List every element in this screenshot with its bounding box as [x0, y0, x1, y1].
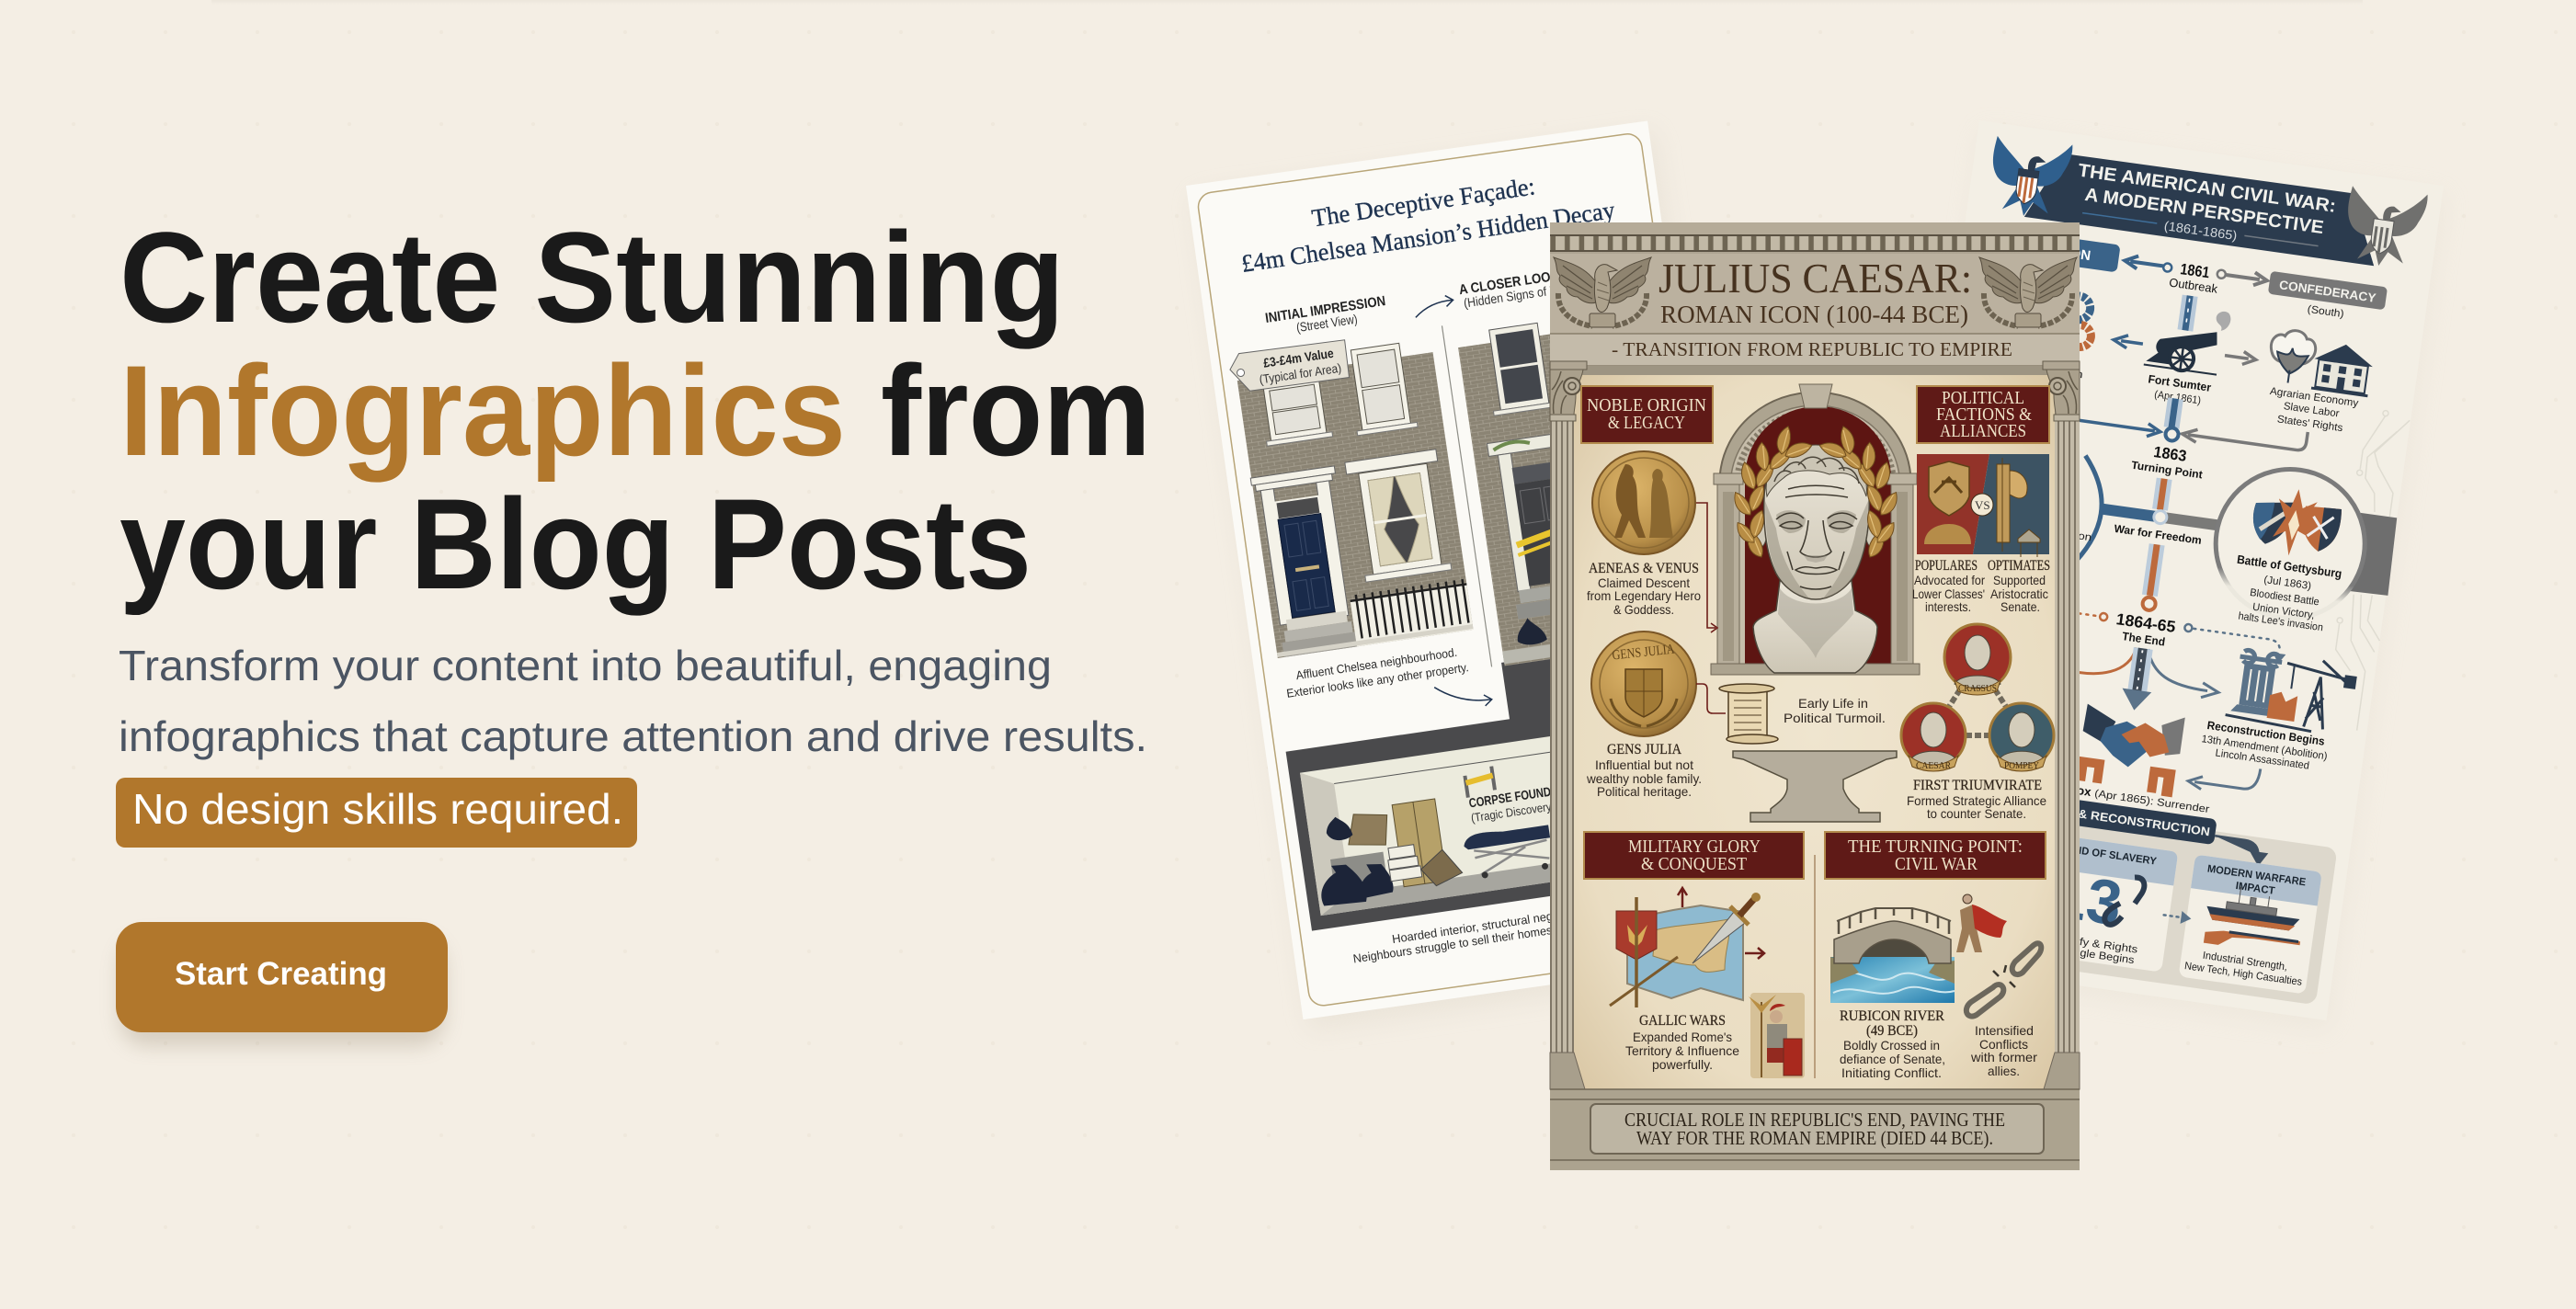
label: gallic wars: GALLIC WARS	[1639, 1013, 1726, 1029]
card: Chelsea mansion infographic	[1208, 157, 1746, 971]
caption: interior: Hoarded interior, structural neglect.	[1391, 905, 1575, 946]
caption: interior: Neighbours struggle to sell their homes.	[1352, 923, 1556, 965]
headline: your Blog Posts	[120, 472, 1032, 616]
pedestal	[1733, 751, 1897, 822]
battle of gettysburg callout: Bloodiest Battle	[2249, 587, 2320, 608]
label: corpse found: (Tragic Discovery)	[1470, 799, 1556, 825]
cornice and dentil frieze	[1550, 222, 2080, 251]
medallion: crassus	[1944, 624, 2011, 695]
title banner	[2024, 149, 2384, 266]
label: gens julia: wealthy noble family.	[1586, 771, 1702, 786]
label: early life: Early Life in	[1798, 696, 1868, 711]
label: confederacy: CONFEDERACY	[2278, 278, 2377, 305]
year 1863: Turning Point	[2130, 459, 2204, 481]
label: fort sumter: Fort Sumter	[2148, 372, 2212, 394]
arrow: north to 1863	[2076, 414, 2161, 438]
label: corpse found	[1465, 758, 1556, 825]
year 1864-65: The End	[2121, 630, 2166, 649]
headline: Infographics	[120, 338, 846, 483]
label: early life	[1784, 696, 1886, 725]
label: populares: Lower Classes'	[1912, 586, 1985, 601]
label: aeneas and venus: from Legendary Hero	[1587, 588, 1701, 603]
label: left columns: Urbanization	[2009, 359, 2083, 381]
icon: reconstruction	[2225, 648, 2358, 736]
icon: broken chain	[1966, 943, 2041, 1017]
card title: £4m Chelsea Mansion’s Hidden Decay	[1239, 196, 1617, 278]
arrow: to interior	[1434, 679, 1493, 712]
title banner: (1861-1865)	[2163, 218, 2238, 243]
legacy panel	[1900, 779, 2339, 1005]
union box	[2016, 231, 2121, 272]
right column	[2043, 361, 2080, 1089]
banner: turning point: CIVIL WAR	[1895, 854, 1978, 874]
title banner: THE AMERICAN CIVIL WAR:	[2077, 161, 2337, 217]
label: fort sumter	[2146, 372, 2212, 408]
label: populares	[1912, 558, 1985, 614]
banner: turning point: THE TURNING POINT:	[1848, 837, 2023, 857]
bust: neck shadow	[1778, 588, 1853, 658]
header band	[1550, 254, 2080, 333]
year 1863	[2130, 440, 2206, 481]
dotted arrow: slavery to warfare	[2163, 908, 2192, 925]
section label: closer look: A CLOSER LOOK	[1458, 267, 1560, 298]
pill: legacy and reconstruction	[2012, 791, 2217, 845]
highlight badge	[116, 778, 637, 848]
label: populares: Advocated for	[1914, 573, 1985, 587]
icon: battle shields	[2249, 484, 2344, 562]
label: intensified conflicts: allies.	[1988, 1064, 2020, 1078]
icon: union eagle	[1986, 134, 2073, 222]
banner: political factions: POLITICAL	[1942, 388, 2024, 408]
arrow: south to 1863	[2182, 415, 2308, 458]
box: modern warfare: IMPACT	[2235, 881, 2275, 897]
subheading text	[119, 642, 1147, 760]
banner: noble origin	[1581, 386, 1713, 443]
box: modern warfare: New Tech, High Casualties	[2183, 961, 2303, 988]
bust: facial features	[1776, 485, 1857, 589]
dark lower panel	[1278, 632, 1740, 931]
arrow: to modern warfare	[2212, 836, 2268, 865]
caption: street view: Affluent Chelsea neighbourhood.	[1295, 645, 1458, 682]
caption: street view: Exterior looks like any other property.	[1285, 660, 1469, 700]
bust: hair	[1766, 445, 1866, 496]
label: confederacy: (South)	[2307, 304, 2344, 320]
box: end of slavery: 13	[2047, 860, 2126, 939]
card title	[1235, 161, 1617, 278]
bust: ears	[1754, 516, 1767, 547]
label: agrarian economy: Slave Labor	[2283, 401, 2340, 420]
call to action button	[116, 922, 448, 1046]
label: aeneas and venus: & Goddess.	[1613, 602, 1674, 617]
medallion: pompey	[1989, 703, 2054, 771]
banner: military glory: MILITARY GLORY	[1628, 837, 1761, 857]
label: intensified conflicts: Conflicts	[1979, 1037, 2028, 1052]
icon: gens julia coin	[1591, 632, 1696, 736]
battle of gettysburg callout	[2205, 460, 2403, 642]
icon: gens julia coin: GENS JULIA	[1612, 642, 1675, 664]
arrow: 1861 to union	[2124, 255, 2164, 272]
timeline bar 1	[2177, 295, 2198, 332]
subheading text: infographics that capture attention and drive results.	[119, 712, 1147, 760]
section label: closer look	[1458, 264, 1592, 311]
icon: gears	[2061, 294, 2096, 348]
blue arc	[2069, 456, 2109, 571]
chain links	[1947, 689, 2008, 735]
label: agrarian economy: States' Rights	[2276, 414, 2343, 434]
year 1861: Outbreak	[2168, 276, 2219, 296]
arrow: 1864 to appomattox	[2119, 646, 2158, 712]
title banner: A MODERN PERSPECTIVE	[2083, 185, 2325, 238]
label: intensified conflicts	[1970, 1023, 2037, 1078]
card: Julius Caesar infographic	[1550, 222, 2080, 1170]
section label: initial impression: (Street View)	[1295, 312, 1359, 335]
label: rubicon river: (49 BCE)	[1866, 1023, 1918, 1039]
label: gens julia	[1586, 742, 1702, 799]
banner: political factions: FACTIONS &	[1936, 404, 2032, 425]
house: closer look	[1456, 305, 1706, 666]
caesar arch and bust	[1711, 384, 1920, 675]
label: gens julia: GENS JULIA	[1607, 742, 1682, 757]
vs badge: VS	[1975, 498, 1990, 512]
label: first triumvirate: to counter Senate.	[1927, 806, 2026, 821]
arrow: reconstruction to appomattox	[2187, 759, 2261, 797]
medallion: caesar	[1901, 703, 1966, 771]
year 1864-65	[2114, 609, 2177, 650]
box: modern warfare	[2179, 854, 2322, 995]
bust: face shading	[1765, 501, 1868, 598]
label: rubicon river	[1840, 1008, 1945, 1080]
box: modern warfare: MODERN WARFARE	[2206, 864, 2307, 888]
label: early life: Political Turmoil.	[1784, 711, 1886, 725]
price tag	[1228, 338, 1351, 394]
label: gallic wars: Expanded Rome's	[1633, 1030, 1732, 1044]
label: rubicon river: RUBICON RIVER	[1840, 1008, 1945, 1024]
medallion: crassus: CRASSUS	[1958, 684, 1997, 694]
banner: military glory	[1584, 832, 1804, 879]
connector: coin to scroll	[1696, 684, 1726, 713]
icon: plantation house	[2310, 340, 2376, 396]
label: optimates: OPTIMATES	[1988, 558, 2050, 574]
icon: confederate eagle	[2341, 184, 2428, 271]
highlight badge: No design skills required.	[132, 785, 623, 833]
battle of gettysburg callout: halts Lee's invasion	[2238, 611, 2324, 633]
call to action button: Start Creating	[175, 956, 387, 992]
label: aeneas and venus	[1587, 561, 1701, 617]
subtitle band: - TRANSITION FROM REPUBLIC TO EMPIRE	[1612, 338, 2012, 360]
house: street view	[1235, 338, 1474, 658]
arrow: 1861 to confederacy	[2225, 268, 2268, 287]
icon: gallic wars map	[1610, 888, 1764, 1007]
label: populares: interests.	[1925, 599, 1971, 614]
left column	[1550, 361, 1587, 1089]
icon: roman soldier	[1749, 993, 1805, 1078]
arrow: to closer look	[1413, 294, 1454, 317]
label: agrarian economy: Agrarian Economy	[2269, 386, 2359, 409]
label: first triumvirate	[1907, 778, 2046, 821]
label: appomattox	[2020, 775, 2210, 815]
year 1863: 1863	[2152, 443, 2188, 465]
battle of gettysburg callout: Union Victory,	[2251, 602, 2315, 621]
label: left columns	[1987, 359, 2114, 543]
year 1861: 1861	[2179, 260, 2211, 281]
card background: Chelsea mansion	[1186, 120, 1772, 1030]
subheading text: Transform your content into beautiful, engaging	[119, 642, 1052, 689]
label: optimates: Senate.	[2000, 599, 2040, 614]
year 1861	[2168, 259, 2221, 296]
main title: JULIUS CAESAR:	[1658, 255, 1972, 302]
medallion: caesar: CAESAR	[1916, 761, 1951, 771]
label: first triumvirate: Formed Strategic Alliance	[1907, 793, 2046, 808]
label: corpse found: CORPSE FOUND	[1468, 784, 1552, 810]
node: union	[2163, 263, 2172, 272]
interior room	[1300, 711, 1738, 916]
label: optimates: Aristocratic	[1990, 586, 2048, 601]
icon: scroll	[1719, 684, 1778, 744]
curved arrow: orange to left	[2060, 637, 2137, 680]
label: confederacy	[2265, 271, 2388, 325]
section label: initial impression	[1264, 293, 1388, 339]
node: confederacy	[2217, 269, 2226, 279]
label: reconstruction	[2199, 718, 2331, 774]
war for freedom crossroads: War for Freedom	[2114, 522, 2203, 547]
arrow: to industrial north	[2113, 334, 2144, 350]
year 1864-65: 1864-65	[2115, 609, 2177, 636]
banner: political factions: ALLIANCES	[1940, 421, 2026, 441]
section label: initial impression: INITIAL IMPRESSION	[1264, 293, 1386, 326]
icon: cannon	[2144, 302, 2231, 377]
label: reconstruction: Reconstruction Begins	[2206, 719, 2326, 748]
label: intensified conflicts: Intensified	[1975, 1023, 2034, 1038]
label: aeneas and venus: AENEAS & VENUS	[1589, 561, 1699, 576]
label: agrarian economy	[2265, 386, 2359, 436]
union box: UNION	[2046, 243, 2092, 264]
label: first triumvirate: FIRST TRIUMVIRATE	[1913, 778, 2042, 793]
card: American Civil War infographic	[1861, 120, 2447, 1030]
battle of gettysburg callout: Battle of Gettysburg	[2236, 552, 2342, 581]
icon: shield	[1929, 461, 1969, 516]
icon: caesar crossing	[1956, 894, 2007, 952]
label: intensified conflicts: with former	[1970, 1050, 2037, 1064]
medallion: pompey: POMPEY	[2004, 761, 2039, 771]
card title: The Deceptive Façade:	[1310, 172, 1537, 232]
label: rubicon river: Boldly Crossed in	[1843, 1038, 1940, 1053]
box: modern warfare: Industrial Strength,	[2202, 950, 2288, 973]
label: gens julia: Influential but not	[1595, 757, 1693, 772]
icon: left roman eagle	[1554, 257, 1651, 327]
label: rubicon river: defiance of Senate,	[1840, 1052, 1945, 1066]
banner: noble origin: & LEGACY	[1608, 413, 1685, 433]
dotted link: left to 1864	[2049, 606, 2108, 621]
dotted link: 1864 to reconstruction	[2182, 624, 2288, 665]
node: 1863	[2165, 427, 2179, 441]
subtitle band	[1550, 334, 2080, 366]
curved arrow: to reconstruction	[2143, 649, 2223, 700]
bottom plaque: CRUCIAL ROLE IN REPUBLIC'S END, PAVING THE	[1624, 1109, 2005, 1131]
arrow: to agrarian south	[2224, 349, 2257, 366]
label: reconstruction: Lincoln Assassinated	[2215, 747, 2310, 772]
price tag: £3-£4m Value	[1262, 346, 1335, 370]
icon: aeneas and venus coin	[1592, 451, 1695, 554]
caption: interior	[1351, 905, 1577, 965]
label: aeneas and venus: Claimed Descent	[1598, 575, 1690, 590]
bottom plaque	[1550, 1089, 2080, 1170]
battle of gettysburg callout: (Jul 1863)	[2263, 575, 2312, 592]
label: appomattox: Appomattox	[2020, 775, 2092, 799]
icon: cotton	[2266, 327, 2318, 386]
bust: shoulders and neck	[1753, 581, 1877, 673]
parchment area	[1574, 375, 2055, 1089]
timeline bar 2	[2164, 397, 2183, 429]
box: end of slavery: Identify & Rights	[2049, 932, 2138, 956]
caption: street view	[1283, 643, 1469, 700]
price tag: (Typical for Area)	[1259, 361, 1342, 387]
label: optimates	[1988, 558, 2050, 614]
headline: Create Stunning	[120, 205, 1065, 349]
bottom plaque: WAY FOR THE ROMAN EMPIRE (DIED 44 BCE).	[1636, 1127, 1993, 1149]
headline	[120, 205, 1151, 616]
banner: turning point	[1825, 832, 2046, 879]
banner: noble origin: NOBLE ORIGIN	[1587, 395, 1706, 415]
banner: political factions	[1917, 386, 2049, 443]
label: gens julia: Political heritage.	[1597, 784, 1692, 799]
label: gallic wars	[1625, 1013, 1739, 1072]
icon: right roman eagle	[1979, 257, 2077, 327]
icon: rubicon bridge	[1830, 908, 1955, 1003]
bust: head	[1764, 449, 1869, 599]
label: optimates: Supported	[1993, 573, 2046, 587]
icon: fasces	[1997, 464, 2010, 542]
vs badge	[1971, 494, 1993, 516]
subtitle: ROMAN ICON (100-44 BCE)	[1660, 301, 1968, 328]
label: gallic wars: powerfully.	[1652, 1057, 1713, 1072]
label: reconstruction: 13th Amendment (Abolition)	[2201, 734, 2328, 762]
factions illustration	[1917, 454, 2049, 557]
label: gallic wars: Territory & Influence	[1625, 1043, 1739, 1058]
label: populares: POPULARES	[1915, 558, 1978, 574]
label: fort sumter: (Apr 1861)	[2153, 389, 2202, 406]
banner: military glory: & CONQUEST	[1641, 854, 1747, 874]
box: end of slavery: Struggle Begins	[2051, 944, 2135, 966]
label: appomattox: (Apr 1865): Surrender	[2093, 789, 2210, 815]
pill: legacy and reconstruction: LEGACY & RECONSTRUCTION	[2022, 799, 2211, 838]
box: end of slavery	[2020, 832, 2178, 973]
box: end of slavery: END OF SLAVERY	[2067, 844, 2158, 868]
connector: coin to arch	[1696, 503, 1717, 632]
triumvirate medallions	[1901, 624, 2054, 771]
label: rubicon river: Initiating Conflict.	[1841, 1065, 1942, 1080]
circuit decoration	[2321, 408, 2411, 732]
section label: closer look: (Hidden Signs of Neglect)	[1463, 278, 1592, 311]
icon: handshake	[2076, 703, 2185, 798]
label: left columns: Emancipation	[2018, 522, 2092, 543]
bust: laurel wreath	[1730, 425, 1901, 560]
headline: from	[881, 338, 1151, 483]
war for freedom crossroads	[2090, 471, 2230, 619]
